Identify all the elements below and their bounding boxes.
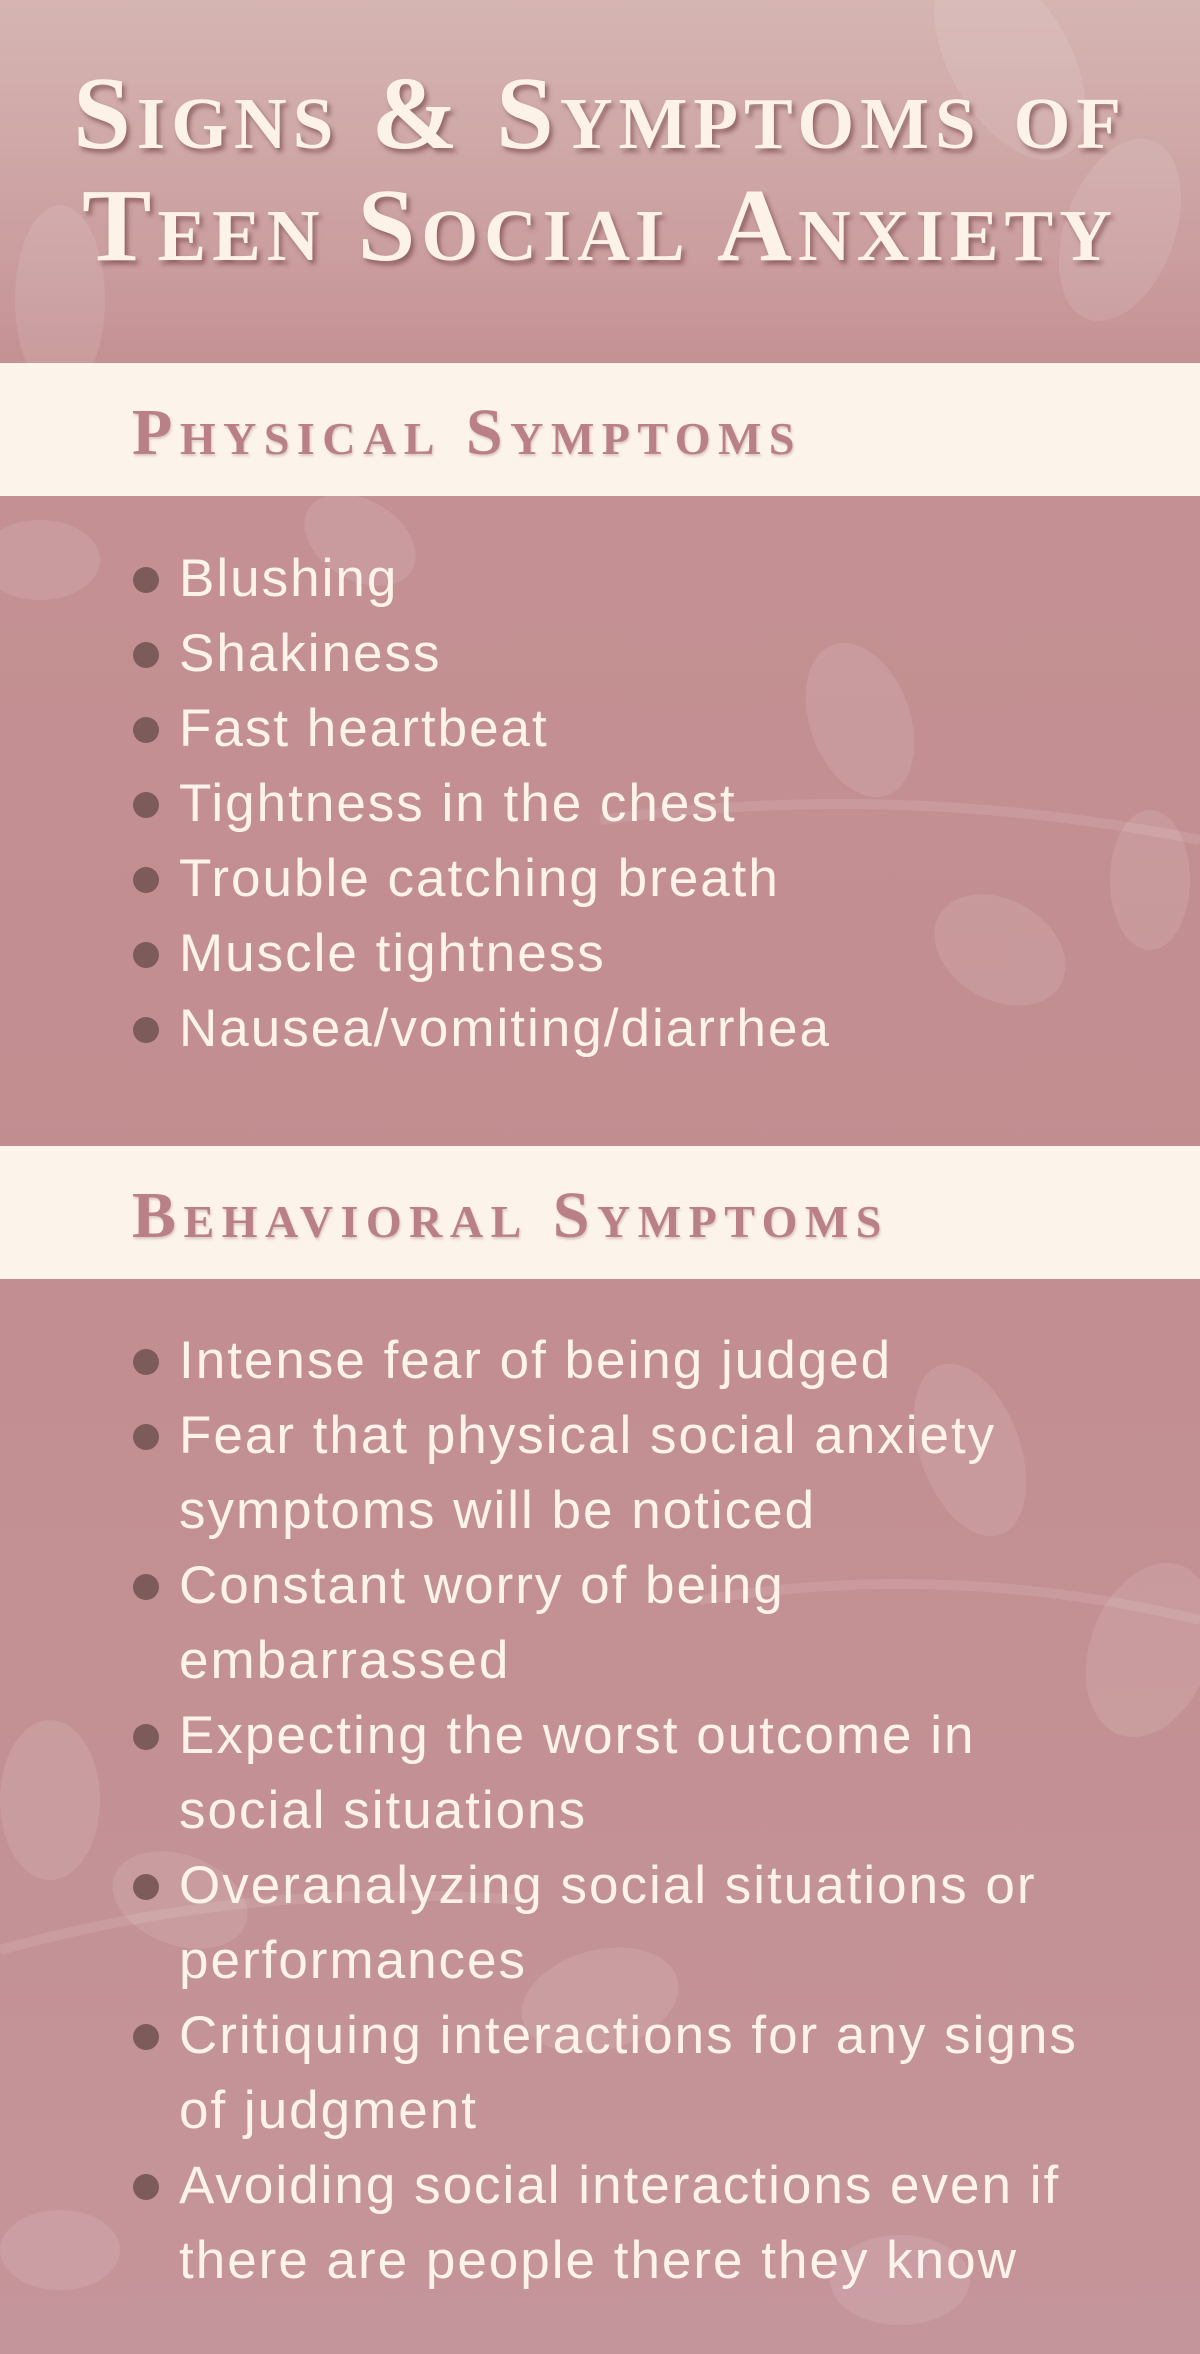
list: behavioral symptoms: Intense fear of being judged (179, 1331, 892, 1390)
list: behavioral symptoms: Overanalyzing social situations or (179, 1856, 1036, 1915)
list: behavioral symptoms: social situations (179, 1781, 587, 1840)
list: behavioral symptoms: performances (179, 1931, 527, 1990)
title: Signs & Symptoms of (73, 56, 1127, 171)
list: physical symptoms: Blushing (179, 549, 398, 608)
list: physical symptoms: Trouble catching breath (179, 849, 780, 908)
title (73, 56, 1127, 283)
band: behavioral symptoms heading: Behavioral Symptoms (132, 1179, 889, 1252)
title: Teen Social Anxiety (82, 168, 1118, 283)
band: physical symptoms heading: Physical Symptoms (132, 396, 802, 469)
list: behavioral symptoms: Avoiding social interactions even if (179, 2156, 1060, 2215)
list: physical symptoms: Muscle tightness (179, 924, 606, 983)
list: physical symptoms: Shakiness (179, 624, 442, 683)
list: behavioral symptoms: of judgment (179, 2081, 478, 2140)
list: behavioral symptoms: Constant worry of being (179, 1556, 785, 1615)
list: behavioral symptoms: Critiquing interactions for any signs (179, 2006, 1078, 2065)
list: behavioral symptoms: Expecting the worst outcome in (179, 1706, 976, 1765)
list: physical symptoms: Tightness in the chest (179, 774, 737, 833)
list: physical symptoms (133, 549, 831, 1058)
list: behavioral symptoms: symptoms will be noticed (179, 1481, 816, 1540)
list: behavioral symptoms: there are people there they know (179, 2231, 1018, 2290)
band: physical symptoms heading (0, 363, 1200, 496)
band: behavioral symptoms heading (0, 1146, 1200, 1279)
list: physical symptoms: Nausea/vomiting/diarrhea (179, 999, 831, 1058)
list: behavioral symptoms: Fear that physical social anxiety (179, 1406, 996, 1465)
list: physical symptoms: Fast heartbeat (179, 699, 549, 758)
list: behavioral symptoms: embarrassed (179, 1631, 510, 1690)
